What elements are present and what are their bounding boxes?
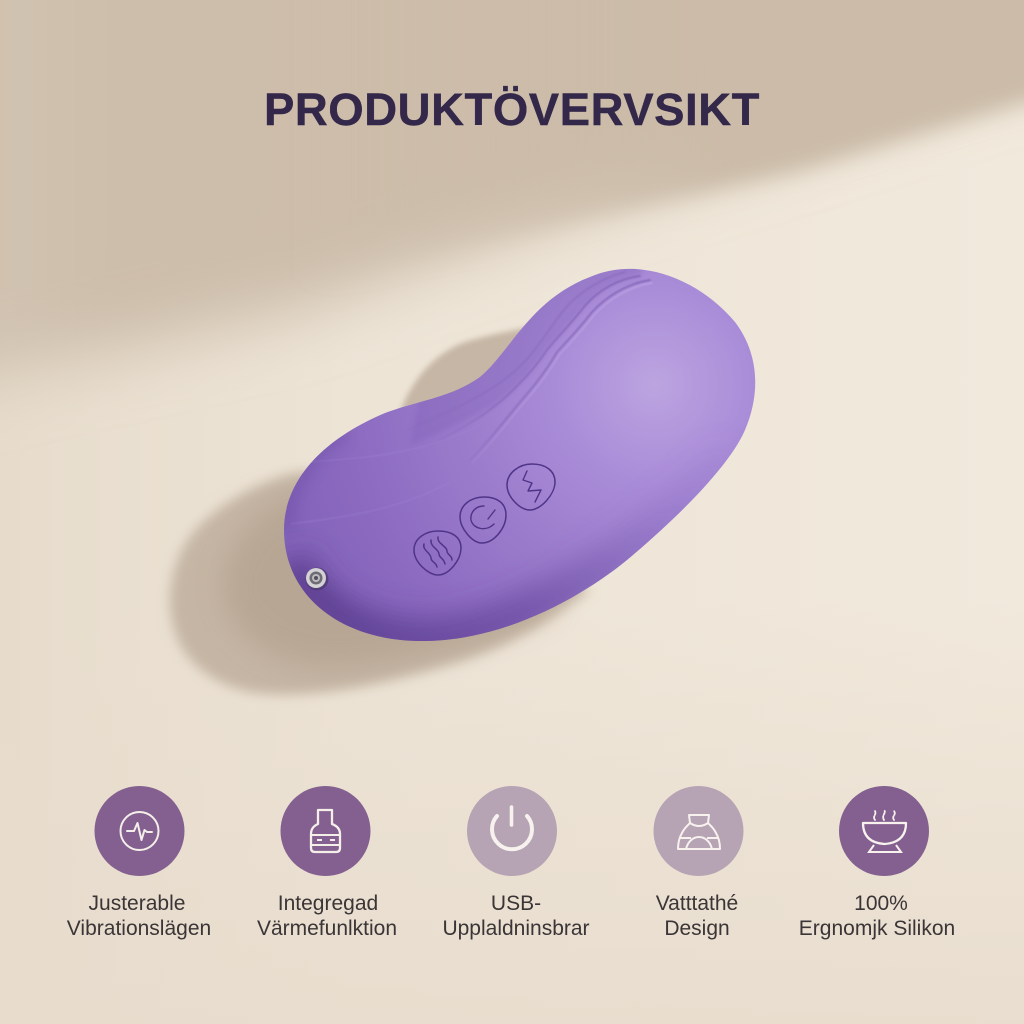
label: adjustable vibration: Justerable (89, 892, 185, 915)
wall shadow band (0, 0, 1024, 410)
label: waterproof design (656, 892, 738, 940)
label: USB charging: USB- (491, 892, 541, 915)
icon: heating bottle (280, 786, 370, 876)
label: adjustable vibration: Vibrationslägen (67, 917, 211, 940)
icon: silicone bowl (839, 786, 929, 876)
icon: USB power (467, 786, 557, 876)
label: adjustable vibration (66, 892, 211, 940)
title: PRODUKTÖVERVSIKT (264, 84, 760, 135)
label: waterproof design: Vatttathé (656, 892, 738, 915)
label: USB charging: Upplaldninsbrar (442, 917, 590, 940)
charging port (306, 568, 328, 590)
icon: adjustable vibration (94, 786, 184, 876)
label: waterproof design: Design (664, 917, 730, 940)
shading: left edge (284, 435, 344, 524)
ridges (469, 272, 652, 444)
shading: dark area above first ridge (416, 268, 642, 437)
shading: lower edge (286, 492, 690, 641)
button: power (460, 497, 506, 543)
icon: waterproof design (654, 786, 744, 876)
label: silicone (799, 892, 955, 940)
product body (284, 261, 755, 641)
label: integrated heating (257, 892, 397, 940)
button: vibration (507, 464, 555, 510)
button: heat (414, 531, 461, 575)
label: silicone: Ergnomjk Silikon (799, 917, 955, 940)
shading: lobe facet lines (290, 425, 480, 524)
label: silicone: 100% (854, 892, 908, 915)
label: integrated heating: Integregad (278, 892, 378, 915)
label: integrated heating: Värmefunlktion (257, 917, 397, 940)
product cast shadow (170, 327, 590, 694)
label: USB charging (442, 892, 590, 940)
